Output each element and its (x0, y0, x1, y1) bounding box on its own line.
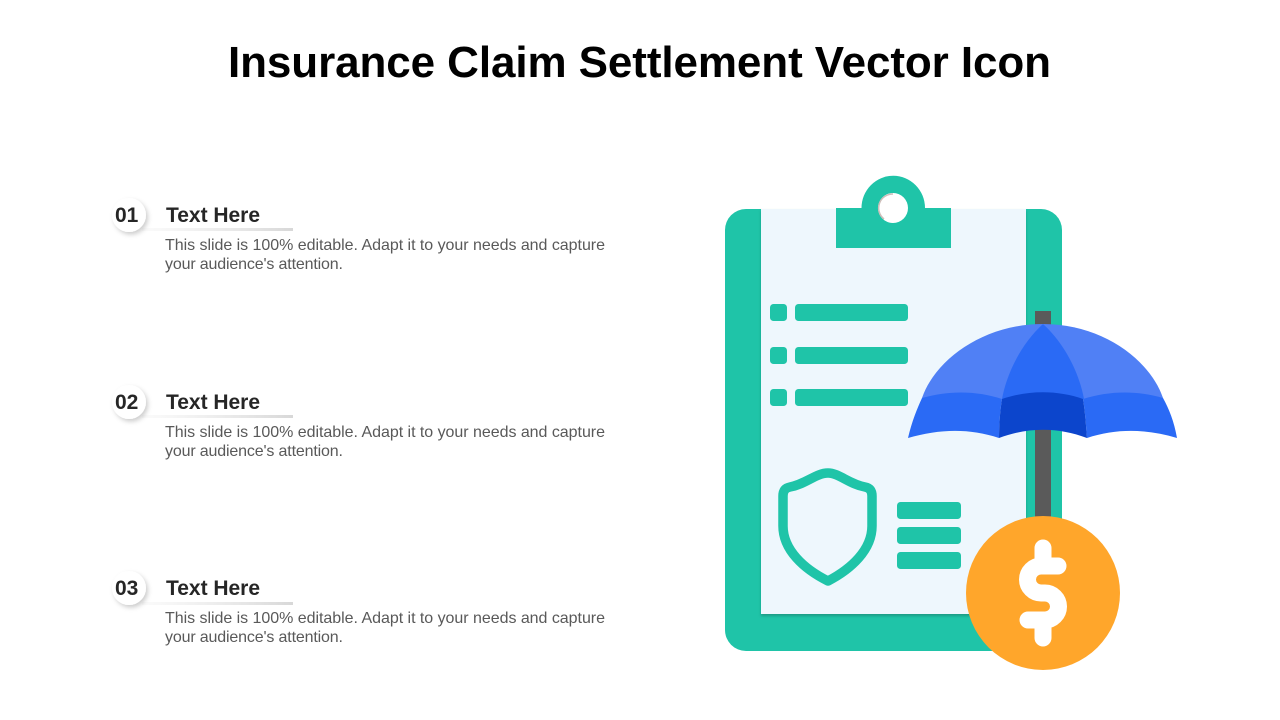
umbrella pole (1035, 311, 1051, 526)
canopy upper centre panel (1002, 324, 1084, 399)
shield detail lines (897, 502, 961, 569)
body text 01: your audience's attention. (165, 256, 343, 273)
rule 03 (142, 602, 293, 605)
coin disc (966, 516, 1120, 670)
icon: umbrella (908, 311, 1177, 526)
clip (836, 176, 951, 248)
heading 03: Text Here (166, 577, 260, 600)
number badge 01 (112, 198, 146, 232)
list item 01 (112, 198, 605, 273)
number badge 03: 03 (115, 577, 138, 600)
canopy lower right panel (1083, 392, 1177, 438)
clipboard board (725, 209, 1062, 651)
icon: insurance claim clipboard (725, 176, 1062, 651)
heading 01: Text Here (166, 204, 260, 227)
body text 03: your audience's attention. (165, 629, 343, 646)
number badge 01: 01 (115, 204, 139, 227)
canopy lower centre panel (999, 392, 1087, 438)
canopy lower left panel (908, 392, 1002, 438)
heading 02: Text Here (166, 391, 260, 414)
number badge 02 (112, 385, 146, 419)
number badge 03 (112, 571, 146, 605)
list item 03 (112, 571, 605, 646)
list item 02 (112, 385, 605, 460)
paper sheet (761, 209, 1026, 614)
rule 01 (142, 228, 293, 231)
body text 03: This slide is 100% editable. Adapt it to your needs and capture (165, 610, 605, 627)
canopy upper outer panels (922, 324, 1163, 399)
body text 01: This slide is 100% editable. Adapt it to your needs and capture (165, 237, 605, 254)
dollar sign (1028, 548, 1058, 638)
body text 03 (165, 610, 605, 646)
icon: shield outline (783, 473, 872, 581)
title: Insurance Claim Settlement Vector Icon (228, 38, 1051, 87)
body text 02: This slide is 100% editable. Adapt it to your needs and capture (165, 424, 605, 441)
body text 02 (165, 424, 605, 460)
checklist lines (770, 304, 908, 406)
rule 02 (142, 415, 293, 418)
body text 01 (165, 237, 605, 273)
body text 02: your audience's attention. (165, 443, 343, 460)
number badge 02: 02 (115, 391, 138, 414)
icon: dollar coin (966, 516, 1120, 670)
